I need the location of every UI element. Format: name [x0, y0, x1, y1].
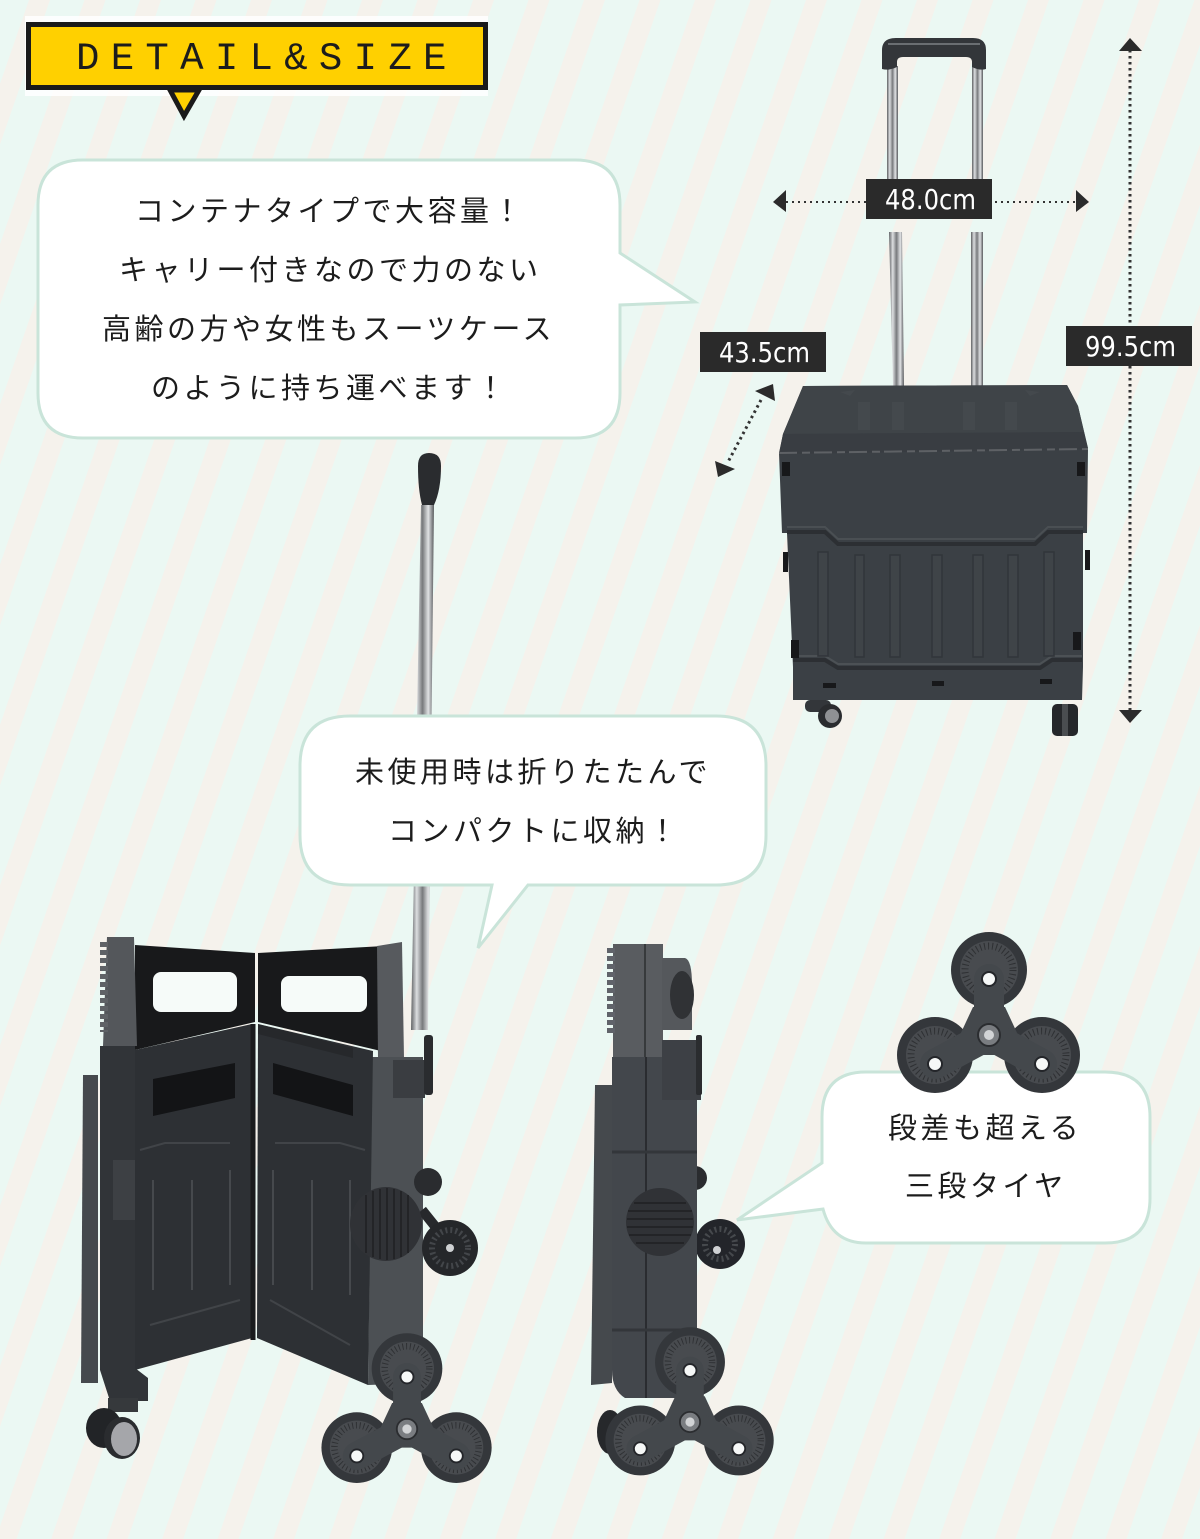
foot pedal disk	[350, 1187, 422, 1261]
far left panel	[81, 1075, 98, 1383]
foot pedal disk	[626, 1188, 694, 1256]
right side body	[368, 942, 433, 1385]
speech bubble: compact storage: コンパクトに収納！	[388, 815, 681, 848]
speech bubble: capacity: コンテナタイプで大容量！	[135, 195, 525, 228]
back panels with handle windows	[135, 945, 385, 1052]
stair-climbing wheel	[321, 1333, 492, 1483]
title banner: DETAIL&SIZE: DETAIL&SIZE	[76, 37, 458, 81]
far left panel	[591, 1085, 612, 1385]
small rear wheels	[414, 1168, 478, 1276]
main body	[612, 1035, 702, 1398]
casters	[805, 700, 1078, 736]
dimension: depth 43.5cm: 43.5cm	[719, 336, 810, 369]
speech bubble: capacity: 高齢の方や女性もスーツケース	[102, 313, 555, 346]
left rail and column	[100, 937, 148, 1401]
speech bubble: capacity: キャリー付きなので力のない	[119, 254, 542, 287]
dimension: height 99.5cm	[1066, 38, 1192, 723]
top rail and zigzag	[611, 944, 663, 1057]
speech bubble: three-tier wheel: 三段タイヤ	[905, 1170, 1067, 1203]
rear wheels	[683, 1166, 745, 1269]
speech bubble: three-tier wheel: 段差も超える	[888, 1112, 1082, 1145]
dimension: height 99.5cm: 99.5cm	[1085, 330, 1176, 363]
stair-climbing wheel	[605, 1327, 774, 1475]
dimension: width 48.0cm: 48.0cm	[885, 183, 976, 216]
caster behind wheel	[597, 1410, 623, 1454]
photo: stair-climbing wheel close-up	[897, 932, 1080, 1093]
photo: folded cart side view	[591, 944, 774, 1475]
dimension: depth 43.5cm	[700, 332, 826, 477]
telescopic handle	[882, 38, 986, 386]
folded handle knob	[662, 958, 694, 1030]
speech bubble: three-tier wheel	[737, 1072, 1150, 1243]
photo: folded cart open view	[81, 453, 492, 1483]
speech bubble: compact storage: 未使用時は折りたたんで	[355, 756, 711, 789]
speech bubble: capacity	[38, 160, 695, 438]
speech bubble: capacity: のように持ち運べます！	[151, 372, 509, 405]
caster wheel	[86, 1398, 140, 1459]
photo: assembled trolley cart front view	[779, 38, 1090, 736]
front panels	[135, 1024, 373, 1385]
title banner: DETAIL&SIZE	[25, 16, 488, 116]
pole with knob	[411, 453, 441, 1030]
dimension: width 48.0cm	[773, 179, 1089, 219]
storage box body	[779, 385, 1090, 700]
speech bubble: compact storage	[300, 716, 766, 948]
